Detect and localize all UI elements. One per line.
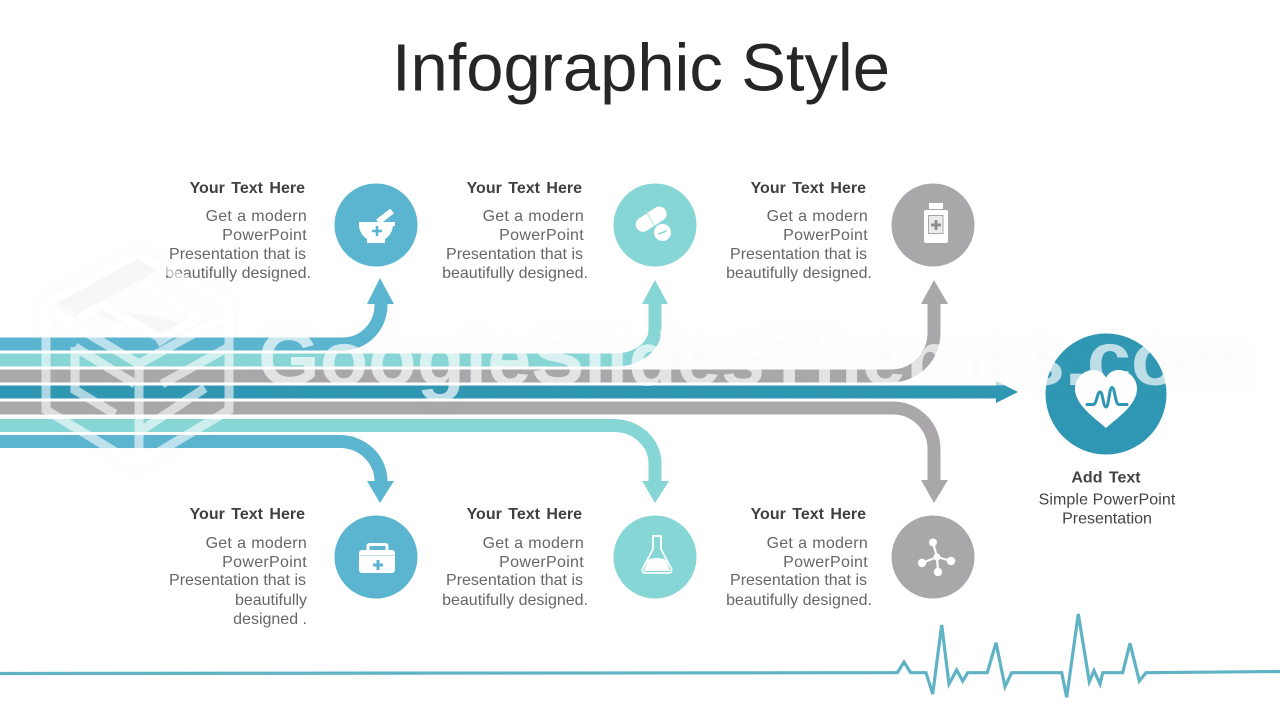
text block: top column 2: beautifully designed.: [442, 265, 588, 282]
text block: top column 3: Your Text Here: [751, 180, 866, 197]
text block: Add Text caption: [1039, 470, 1176, 528]
text block: bottom column 2: PowerPoint: [499, 554, 584, 571]
text block: bottom column 3: Presentation that is: [730, 572, 867, 589]
text block: top column 2: Presentation that is: [446, 246, 583, 263]
text block: bottom column 3: Get a modern: [767, 535, 868, 552]
text block: top column 3: Get a modern: [767, 208, 868, 225]
text block: Add Text caption: Presentation: [1062, 510, 1152, 528]
text block: top column 2: Get a modern: [483, 208, 584, 225]
text block: bottom column 1: beautifully: [235, 592, 307, 609]
text block: bottom column 2: beautifully designed.: [442, 592, 588, 609]
watermark: cube logo: [46, 254, 229, 465]
arrow: teal down to flask icon: [0, 426, 669, 503]
text block: bottom column 1: PowerPoint: [222, 554, 307, 571]
text block: bottom column 3: Your Text Here: [751, 506, 866, 523]
text block: top column 2: PowerPoint: [499, 227, 584, 244]
text block: bottom column 1: Presentation that is: [169, 572, 306, 589]
text block: bottom column 3: beautifully designed.: [726, 592, 872, 609]
heartbeat line: [0, 614, 1280, 697]
arrow: blue up to mortar icon: [0, 278, 394, 344]
text block: bottom column 1: Get a modern: [206, 535, 307, 552]
text block: bottom column 2: Get a modern: [483, 535, 584, 552]
arrow: dark centre arrow to heart icon: [0, 381, 1018, 403]
text block: Add Text caption: Simple PowerPoint: [1039, 492, 1176, 508]
text block: bottom column 3: PowerPoint: [783, 554, 868, 571]
arrow: gray down to molecule icon: [0, 408, 948, 503]
icon: flask circle: [614, 516, 696, 598]
text block: bottom column 1: [169, 506, 307, 628]
text block: bottom column 3: [726, 506, 872, 609]
text block: top column 1: Presentation that is: [169, 246, 306, 263]
arrow: blue down to medical kit icon: [0, 442, 394, 503]
arrow: teal up to pills icon: [0, 280, 668, 360]
text block: top column 1: Your Text Here: [190, 180, 305, 197]
arrow: gray up to bottle icon: [0, 280, 948, 376]
text block: bottom column 1: designed .: [233, 611, 307, 628]
text block: top column 3: Presentation that is: [730, 246, 867, 263]
icon: mortar and pestle circle: [334, 184, 418, 266]
text block: bottom column 2: Presentation that is: [446, 572, 583, 589]
text block: Add Text caption: Add Text: [1071, 470, 1141, 486]
text block: top column 3: beautifully designed.: [726, 265, 872, 282]
text block: top column 3: [726, 180, 872, 282]
icon: pills circle: [614, 184, 696, 266]
text block: top column 1: [165, 180, 311, 282]
text block: bottom column 2: [442, 506, 588, 609]
text block: bottom column 2: Your Text Here: [467, 506, 582, 523]
text block: top column 1: PowerPoint: [222, 227, 307, 244]
icon: medical kit circle: [334, 516, 418, 598]
arrows: six branching bands and centre arrow: [0, 278, 1018, 503]
icon: molecule circle: [892, 516, 974, 598]
text block: top column 3: PowerPoint: [783, 227, 868, 244]
icon: medicine bottle circle: [892, 184, 974, 266]
text block: top column 1: Get a modern: [206, 208, 307, 225]
text block: bottom column 1: Your Text Here: [190, 506, 305, 523]
watermark: site name: GoogleSlidesThemes.com: [258, 317, 1250, 402]
text block: top column 2: Your Text Here: [467, 180, 582, 197]
title: Infographic Style: [392, 30, 890, 106]
text block: top column 2: [442, 180, 588, 282]
icon: heart with pulse circle: [1046, 334, 1166, 454]
text block: top column 1: beautifully designed.: [165, 265, 311, 282]
